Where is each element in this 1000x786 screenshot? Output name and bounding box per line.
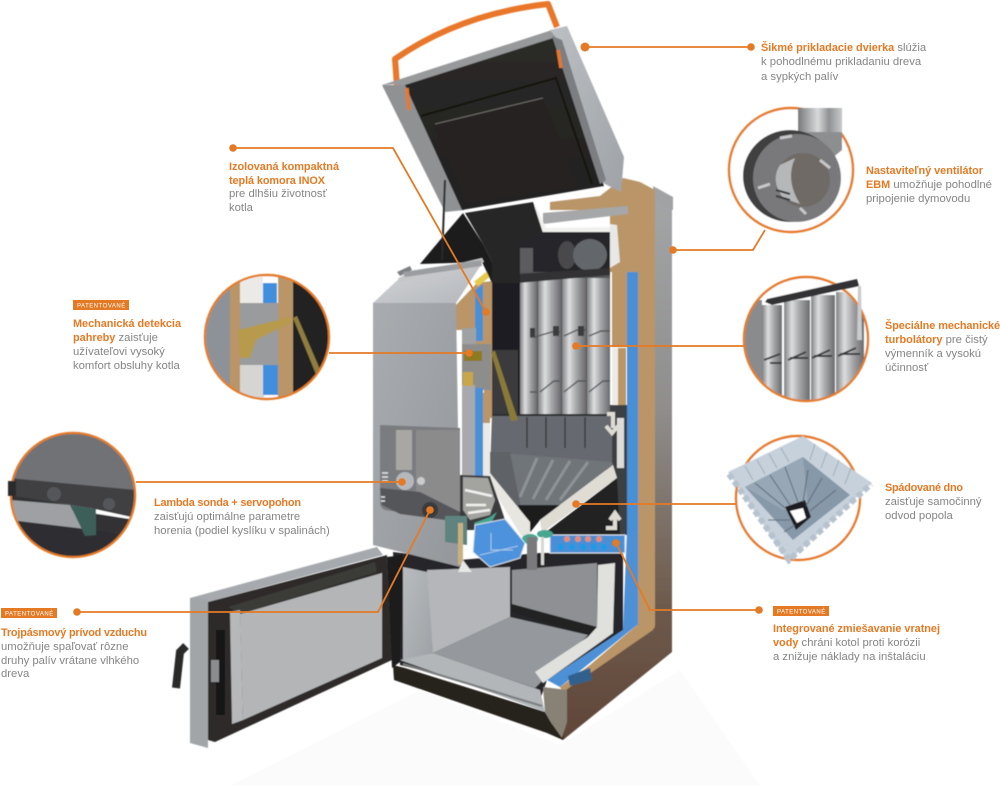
- callout line: fan: [669, 230, 765, 254]
- text: water mixing: a znižuje náklady na inštaláciu: [773, 651, 926, 663]
- callout line: ash detection: [329, 349, 473, 357]
- fan housing in chamber: [558, 241, 576, 269]
- lambda and servo recess: [380, 425, 460, 522]
- text: tilted loading door: [761, 41, 927, 83]
- text: ash detection: pahreby zaisťuje: [73, 332, 158, 344]
- text: insulated inox chamber: [229, 161, 340, 214]
- text: ash detection: komfort obsluhy kotla: [73, 360, 180, 372]
- black base: [393, 665, 565, 740]
- text: lambda probe: Lambda sonda + servopohon: [154, 497, 301, 509]
- text: water mixing: vody chráni kotol proti korózii: [773, 637, 920, 649]
- lid support bar: [403, 260, 482, 277]
- text: tilted loading door: Šikmé prikladacie dvierka slúžia: [761, 41, 927, 54]
- front grey body: [373, 303, 460, 567]
- white inner channel: [535, 563, 615, 683]
- blue air box left: [473, 519, 525, 567]
- door handle: [176, 646, 186, 688]
- text: insulated inox chamber: kotla: [229, 202, 254, 214]
- hopper back wall: [490, 415, 612, 470]
- circle: sloped ash floor detail: [728, 436, 872, 562]
- text: insulated inox chamber: teplá komora INOX: [229, 175, 326, 187]
- circle: lambda probe detail: [8, 433, 136, 560]
- flow arrow down: [606, 414, 618, 433]
- yellow arrow: [476, 272, 500, 284]
- teal air parts: [474, 512, 553, 544]
- text: ash detection: [73, 318, 182, 372]
- callout line: water mixing: [612, 539, 763, 614]
- floor reflection: [230, 670, 760, 786]
- text: turbolators: turbolátory pre čistý: [885, 334, 988, 346]
- circle: ash detection detail: [204, 275, 329, 400]
- circle: turbolators detail: [744, 277, 868, 401]
- callout line: tilted door: [580, 42, 755, 52]
- blue water jacket right: [627, 272, 638, 625]
- text: air supply: [1, 627, 147, 680]
- bracket on body top: [397, 266, 412, 276]
- tan and blue wall of front section: [456, 281, 492, 418]
- boiler illustration: [176, 4, 760, 786]
- left funnel plate: [490, 473, 530, 537]
- top lid: [382, 4, 624, 260]
- gold ash detection lever: [491, 351, 518, 421]
- text: air supply: Trojpásmový prívod vzduchu: [1, 627, 147, 639]
- text: water mixing: Integrované zmiešavanie vratnej: [773, 623, 940, 635]
- text: fan: [866, 165, 992, 205]
- text: lambda probe: zaisťujú optimálne parametre: [154, 511, 300, 523]
- callout line: lambda: [136, 478, 406, 486]
- text: turbolators: výmenník a vysokú: [885, 348, 981, 360]
- badge: patented ash detection: PATENTOVANÉ: [77, 302, 126, 310]
- text: ash detection: Mechanická detekcia: [73, 318, 182, 330]
- text: turbolators: Špeciálne mechanické: [885, 319, 1000, 332]
- text: fan: Nastaviteľný ventilátor: [866, 165, 984, 177]
- text: lambda probe: horenia (podiel kyslíku v spalinách): [154, 525, 330, 537]
- text: air supply: dreva: [1, 668, 30, 680]
- badge: patented ash detection: [73, 300, 129, 310]
- air channel mechanism: [460, 475, 505, 530]
- return water mixing box: [550, 535, 625, 553]
- text: fan: pripojenie dymovodu: [866, 193, 970, 205]
- text: ash detection: užívateľovi vysoký: [73, 346, 165, 358]
- text: turbolators: [885, 319, 1000, 374]
- ash chamber: [393, 552, 623, 712]
- callout line: inox chamber: [229, 144, 490, 316]
- text: sloped floor: odvod popola: [885, 510, 954, 522]
- text: sloped floor: Spádované dno: [885, 482, 963, 494]
- badge: patented water mixing: [773, 606, 829, 616]
- center column: [527, 537, 537, 570]
- text: fan: EBM umožňuje pohodlné: [866, 179, 992, 191]
- top collar and flue pipe: [543, 206, 628, 224]
- badge: patented air supply: [1, 608, 57, 618]
- right outer panel: [563, 188, 672, 740]
- text: sloped floor: zaisťuje samočinný: [885, 496, 982, 508]
- text: air supply: umožňuje spaľovať rôzne: [1, 641, 128, 653]
- text: tilted loading door: a sypkých palív: [761, 71, 839, 83]
- text: insulated inox chamber: pre dlhšiu životnosť: [229, 188, 328, 200]
- open door: [176, 547, 392, 748]
- callout line: turbolators: [572, 342, 744, 350]
- door hinge post: [387, 555, 403, 668]
- orange handle: [395, 4, 557, 86]
- heat exchanger turbolators: [492, 268, 610, 418]
- badge: patented air supply: PATENTOVANÉ: [5, 610, 54, 618]
- text: tilted loading door: k pohodlnému prikladaniu dreva: [761, 56, 922, 68]
- badge: patented water mixing: PATENTOVANÉ: [777, 608, 826, 616]
- callout line: air supply: [73, 506, 434, 616]
- text: insulated inox chamber: Izolovaná kompaktná: [229, 161, 340, 173]
- text: lambda probe: [154, 497, 330, 537]
- circle: fan detail: [729, 108, 853, 232]
- text: turbolators: účinnosť: [885, 362, 929, 374]
- flow arrow up: [606, 513, 620, 528]
- text: water mixing: [773, 623, 940, 663]
- right funnel plate: [540, 465, 617, 533]
- lid throat: [465, 202, 543, 283]
- sloped ash funnel: [490, 452, 613, 528]
- text: air supply: druhy palív vrátane vlhkého: [1, 655, 139, 667]
- insulation shell: [550, 178, 655, 692]
- callout line: sloped floor: [572, 500, 736, 508]
- text: sloped floor: [885, 482, 982, 522]
